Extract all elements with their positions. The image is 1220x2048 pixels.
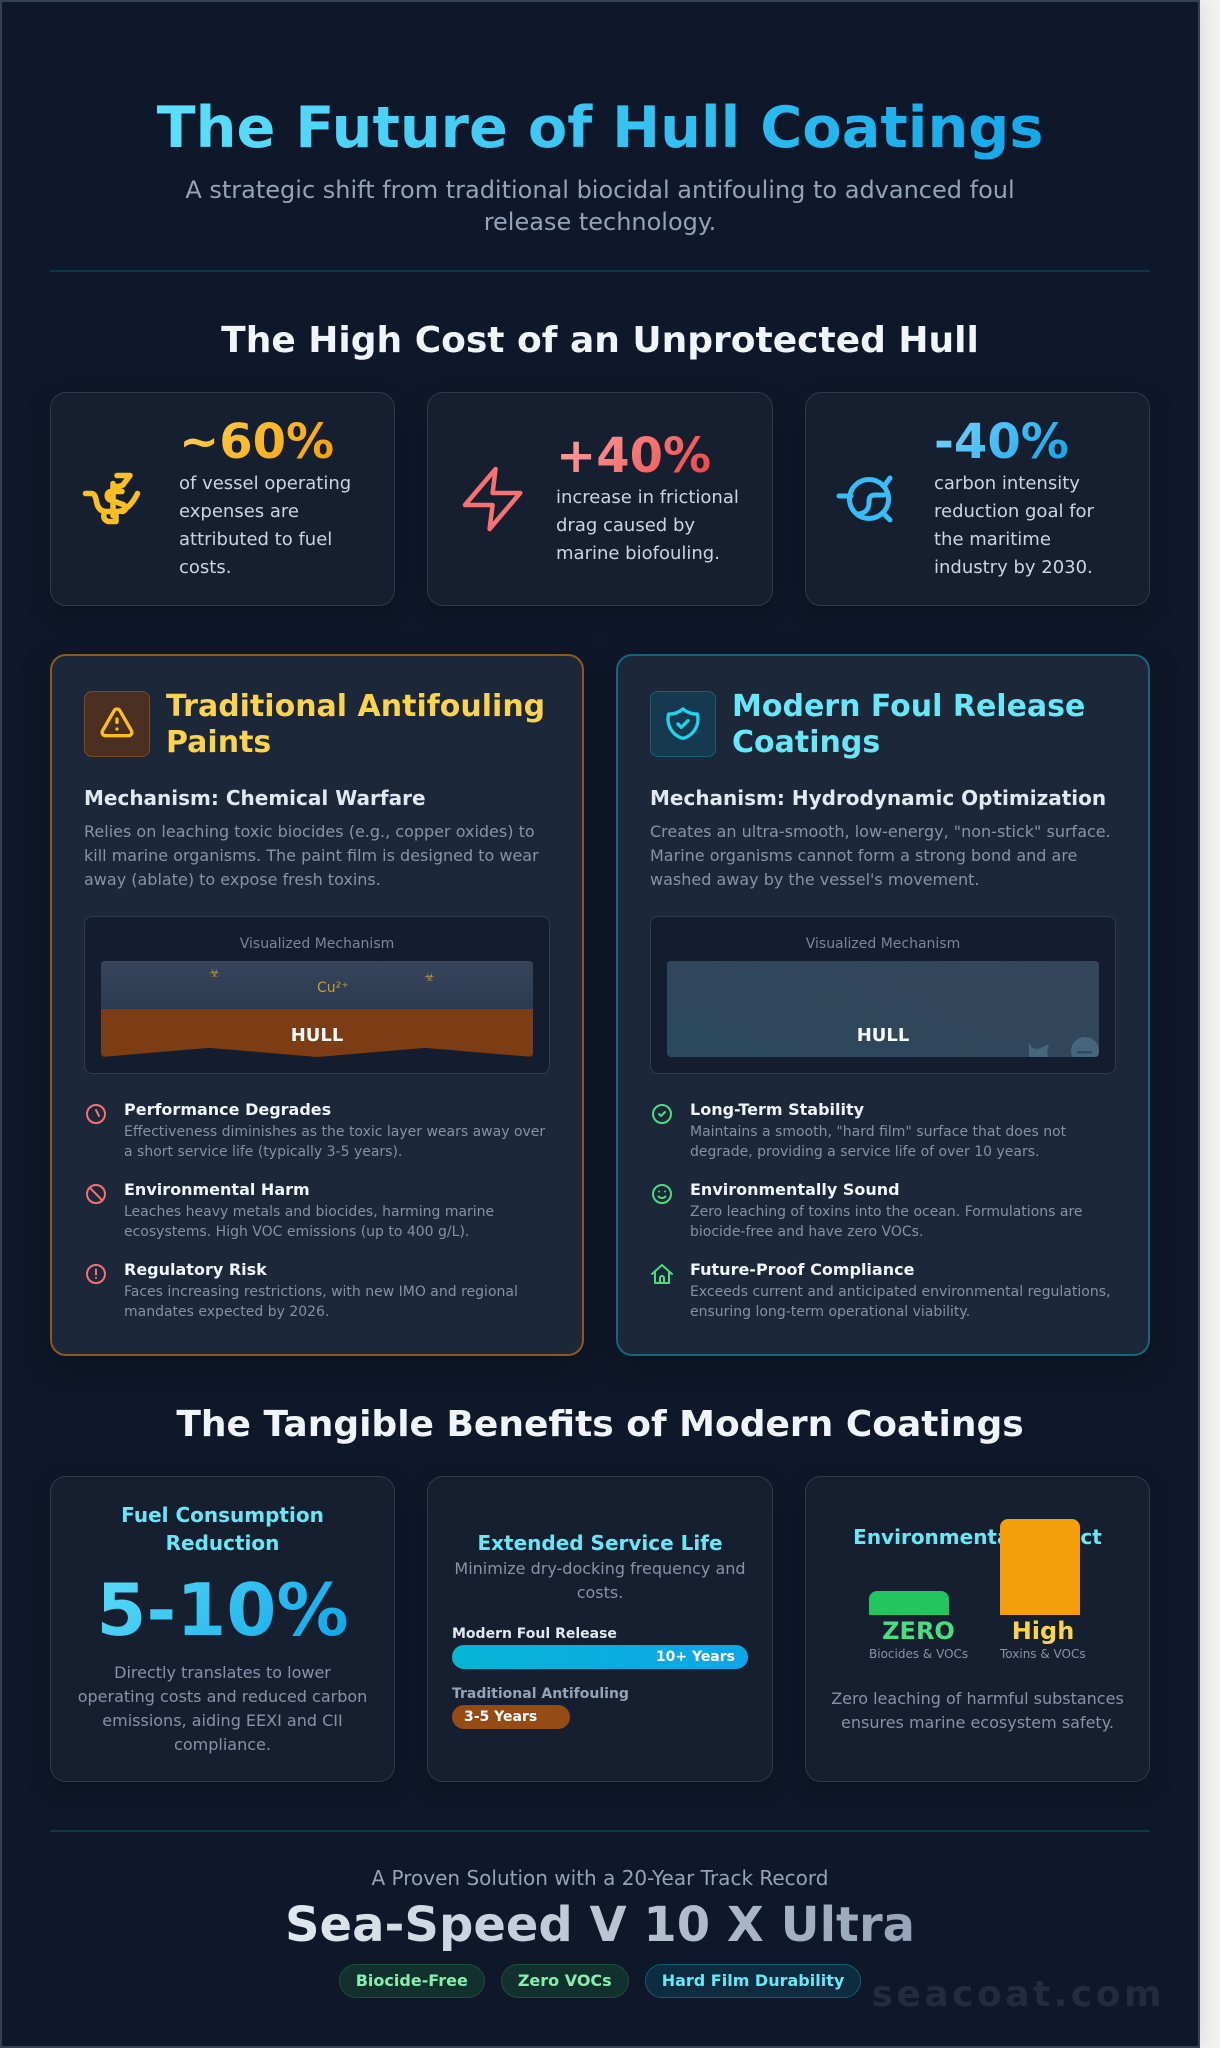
stat text: expenses are (179, 500, 299, 522)
mechanism description: kill marine organisms. The paint film is designed to wear (84, 846, 539, 865)
stat text (934, 414, 1094, 578)
pill: zero vocs (501, 1964, 629, 1998)
mechanism description: away (ablate) to expose fresh toxins. (84, 870, 381, 889)
panel: stat fuel costs (50, 392, 395, 606)
item: future-proof compliance: ensuring long-term operational viability. (690, 1304, 970, 1320)
stat text: marine biofouling. (556, 542, 720, 564)
card description: compliance. (174, 1735, 271, 1754)
bar: zero (869, 1591, 949, 1615)
card heading: Extended Service Life (477, 1531, 723, 1555)
card description: costs. (577, 1583, 623, 1602)
panel header (84, 689, 545, 760)
footer tagline: A Proven Solution with a 20-Year Track Record (372, 1866, 828, 1890)
item: environmental harm: Environmental Harm (124, 1180, 310, 1199)
pill: hard film durability: Hard Film Durability (662, 1971, 844, 1990)
bar: modern (452, 1645, 748, 1669)
bar: traditional: 3-5 Years (464, 1709, 537, 1725)
pill: hard film durability (645, 1964, 861, 1998)
item: future-proof compliance: Exceeds current and anticipated environmental regulations, (690, 1284, 1110, 1300)
item: performance degrades: Performance Degrades (124, 1100, 331, 1119)
item: performance degrades: Effectiveness diminishes as the toxic layer wears away over (124, 1124, 545, 1140)
stat text: the maritime (934, 528, 1051, 550)
diagram label: Visualized Mechanism (806, 936, 960, 952)
card description: operating costs and reduced carbon (78, 1687, 367, 1706)
mechanism description: Relies on leaching toxic biocides (e.g., copper oxides) to (84, 822, 535, 841)
item: environmental harm: Leaches heavy metals and biocides, harming marine (124, 1204, 494, 1220)
card description (831, 1689, 1124, 1732)
mechanism description: Marine organisms cannot form a strong bond and are (650, 846, 1077, 865)
item: long-term stability: Maintains a smooth, "hard film" surface that does not (690, 1124, 1066, 1140)
item: performance degrades (86, 1100, 546, 1160)
panel: modern foul release coatings (616, 654, 1150, 1356)
mechanism description (650, 822, 1111, 889)
stat text: -40% (934, 414, 1069, 470)
stat text: drag caused by (556, 514, 695, 536)
item: future-proof compliance: Future-Proof Compliance (690, 1260, 914, 1279)
stat text: ~60% (179, 414, 334, 470)
diagram: visualized mechanism (84, 916, 550, 1074)
panel heading: Traditional Antifouling (166, 689, 545, 724)
bar: traditional (452, 1705, 570, 1729)
stat text: increase in frictional (556, 486, 739, 508)
panel heading: Coatings (732, 725, 880, 760)
value: zero: ZERO (882, 1617, 955, 1645)
icon: carbon wave circle (836, 476, 892, 522)
item: environmental harm: ecosystems. High VOC emissions (up to 400 g/L). (124, 1224, 469, 1240)
bar chart: service life (452, 1626, 748, 1729)
card description: Minimize dry-docking frequency and (454, 1559, 746, 1578)
item: future-proof compliance (651, 1260, 1110, 1320)
item: environmentally sound: biocide-free and have zero VOCs. (690, 1224, 923, 1240)
hull label: HULL (291, 1025, 343, 1046)
item: long-term stability: Long-Term Stability (690, 1100, 864, 1119)
heading: tangible benefits: The Tangible Benefits of Modern Coatings (176, 1404, 1024, 1445)
biocide particle: ☣ (424, 970, 435, 984)
diagram: smooth hull (667, 961, 1099, 1057)
item: environmentally sound: Environmentally Sound (690, 1180, 900, 1199)
panel heading (732, 689, 1085, 760)
stat text: reduction goal for (934, 500, 1094, 522)
item: environmental harm (86, 1180, 494, 1240)
watermark: seacoat.com (872, 1974, 1165, 2015)
bar label: Modern Foul Release (452, 1626, 617, 1642)
big number: 5-10% (96, 1568, 349, 1652)
stat text: attributed to fuel (179, 528, 332, 550)
panel: extended service life (427, 1476, 773, 1782)
card description (454, 1559, 746, 1602)
icon: shield check (650, 691, 716, 757)
item: performance degrades: a short service life (typically 3-5 years). (124, 1144, 402, 1160)
item: long-term stability: degrade, providing a service life of over 10 years. (690, 1144, 1039, 1160)
card description: Directly translates to lower (114, 1663, 331, 1682)
icon: lightning bolt (462, 466, 522, 532)
list: benefits (651, 1100, 1110, 1320)
panel heading: Paints (166, 725, 271, 760)
stat text: +40% (556, 428, 711, 484)
diagram: leaching hull (101, 961, 533, 1057)
card heading: Reduction (166, 1531, 279, 1555)
stat text: industry by 2030. (934, 556, 1093, 578)
biocide particle: ☣ (209, 966, 220, 980)
title: The Future of Hull Coatings (157, 94, 1043, 161)
pill: biocide-free (339, 1964, 485, 1998)
diagram label: Visualized Mechanism (240, 936, 394, 952)
card description (78, 1663, 367, 1754)
item: environmentally sound (652, 1180, 1083, 1240)
label: biocides: Biocides & VOCs (869, 1647, 968, 1661)
heading: the high cost: The High Cost of an Unprotected Hull (221, 320, 979, 361)
bar: modern: 10+ Years (656, 1649, 735, 1665)
value: high: High (1012, 1617, 1074, 1645)
stat text (556, 428, 739, 564)
bar: high (1000, 1519, 1080, 1615)
card heading (121, 1503, 324, 1555)
panel: traditional antifouling paints (50, 654, 584, 1356)
label: toxins: Toxins & VOCs (1000, 1647, 1086, 1661)
card description: emissions, aiding EEXI and CII (102, 1711, 343, 1730)
card heading: Fuel Consumption (121, 1503, 324, 1527)
icon: warning triangle (84, 691, 150, 757)
diagram: visualized mechanism (650, 916, 1116, 1074)
item: long-term stability (652, 1100, 1066, 1160)
mechanism description: washed away by the vessel's movement. (650, 870, 979, 889)
item: regulatory risk: Regulatory Risk (124, 1260, 267, 1279)
card description: ensures marine ecosystem safety. (841, 1713, 1114, 1732)
panel: stat frictional drag (427, 392, 773, 606)
stat text (179, 414, 351, 578)
pill: zero vocs: Zero VOCs (518, 1971, 612, 1990)
item: regulatory risk (86, 1260, 518, 1320)
card heading: Environmental Impact (853, 1525, 1102, 1549)
mechanism heading: Mechanism: Hydrodynamic Optimization (650, 786, 1106, 810)
panel: stat carbon intensity (805, 392, 1150, 606)
bar label: Traditional Antifouling (452, 1686, 629, 1702)
washed away organisms (1029, 1037, 1099, 1057)
panel: fuel consumption reduction (50, 1476, 395, 1782)
item: regulatory risk: mandates expected by 2026. (124, 1304, 329, 1320)
stat text: of vessel operating (179, 472, 351, 494)
product name: Sea-Speed V 10 X Ultra (285, 1897, 915, 1953)
card description: Zero leaching of harmful substances (831, 1689, 1124, 1708)
list: drawbacks (86, 1100, 546, 1320)
hull label: HULL (857, 1025, 909, 1046)
pill: biocide-free: Biocide-Free (356, 1971, 468, 1990)
subtitle: release technology. (484, 208, 716, 236)
subtitle (185, 176, 1015, 236)
panel heading (166, 689, 545, 760)
icon: fuel cost dollar (82, 472, 140, 524)
mechanism heading: Mechanism: Chemical Warfare (84, 786, 426, 810)
subtitle: A strategic shift from traditional biocidal antifouling to advanced foul (185, 176, 1015, 204)
feature pills (339, 1964, 861, 1998)
stat text: costs. (179, 556, 231, 578)
mechanism description: Creates an ultra-smooth, low-energy, "non-stick" surface. (650, 822, 1111, 841)
item: environmentally sound: Zero leaching of toxins into the ocean. Formulations are (690, 1204, 1083, 1220)
mechanism description (84, 822, 539, 889)
panel heading: Modern Foul Release (732, 689, 1085, 724)
panel: environmental impact (805, 1476, 1150, 1782)
stat text: carbon intensity (934, 472, 1080, 494)
copper ion label: Cu²⁺ (317, 980, 349, 996)
item: regulatory risk: Faces increasing restrictions, with new IMO and regional (124, 1284, 518, 1300)
panel header (650, 689, 1085, 760)
